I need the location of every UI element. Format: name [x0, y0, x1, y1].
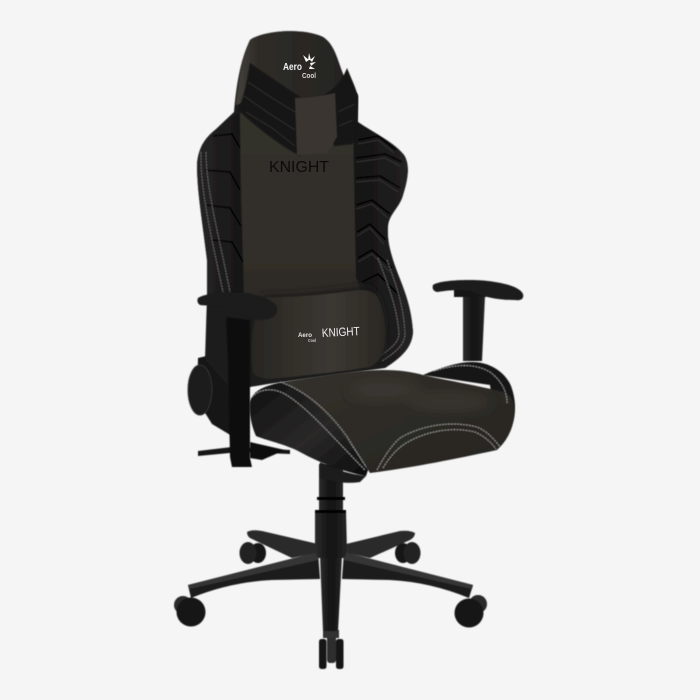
center back suede panel [240, 108, 362, 300]
head top suede [236, 31, 343, 105]
logo: AeroCool on lumbar pillow [298, 332, 316, 343]
lumbar pillow [252, 285, 386, 379]
base leg: front [320, 556, 342, 631]
left armrest post [226, 317, 252, 467]
recline lever [198, 447, 290, 456]
caster: front right [454, 595, 487, 628]
recline mechanism and lever [188, 350, 290, 460]
wordmark: KNIGHT on lumbar pillow: KNIGHT [321, 324, 361, 340]
base leg: back left [247, 530, 318, 558]
five-star base with casters [174, 464, 487, 669]
right side bolster [353, 122, 413, 368]
under-seat shadow [320, 462, 366, 483]
pillow body [252, 290, 385, 379]
back quilting highlights [356, 140, 400, 272]
logo: AeroCool on headrest [283, 53, 316, 80]
headrest pillow [238, 63, 358, 156]
seat suede cushion [283, 370, 514, 473]
rear right bolster [423, 362, 515, 432]
right armrest bracket [454, 290, 486, 297]
back stitching [201, 152, 405, 361]
back quilting ridges [205, 134, 402, 296]
logo: AeroCool on headrest: Aero [283, 61, 302, 73]
seat stitching [252, 366, 507, 470]
seat [250, 362, 515, 483]
pillow shadow [260, 285, 386, 375]
caster: back left [240, 542, 266, 564]
wordmark: KNIGHT on backrest: KNIGHT [269, 159, 329, 176]
logo: AeroCool on headrest: Cool [302, 71, 316, 80]
caster: back right [395, 542, 420, 564]
right armrest [433, 280, 523, 361]
gas lift column [315, 464, 347, 558]
left side bolster [197, 112, 244, 296]
left armrest pad [197, 292, 277, 320]
front left bolster [250, 382, 368, 476]
logo: AeroCool on lumbar pillow: Aero [298, 332, 312, 339]
backrest shell [197, 31, 413, 390]
caster: front [319, 630, 344, 669]
logo leaves [303, 53, 316, 69]
recline knob [188, 365, 212, 415]
base leg: back right [346, 531, 415, 558]
center strap [295, 93, 337, 155]
wing ridges [244, 82, 355, 146]
logo: AeroCool on lumbar pillow: Cool [308, 338, 316, 343]
left armrest [197, 292, 277, 467]
left wing [238, 63, 300, 156]
right wing [324, 68, 358, 146]
base leg: front left [188, 552, 320, 598]
right armrest pad [433, 280, 523, 300]
right armrest post [463, 294, 485, 361]
base leg: front right [342, 552, 473, 598]
caster: front left [174, 596, 206, 626]
seat suede mottling [351, 381, 490, 410]
